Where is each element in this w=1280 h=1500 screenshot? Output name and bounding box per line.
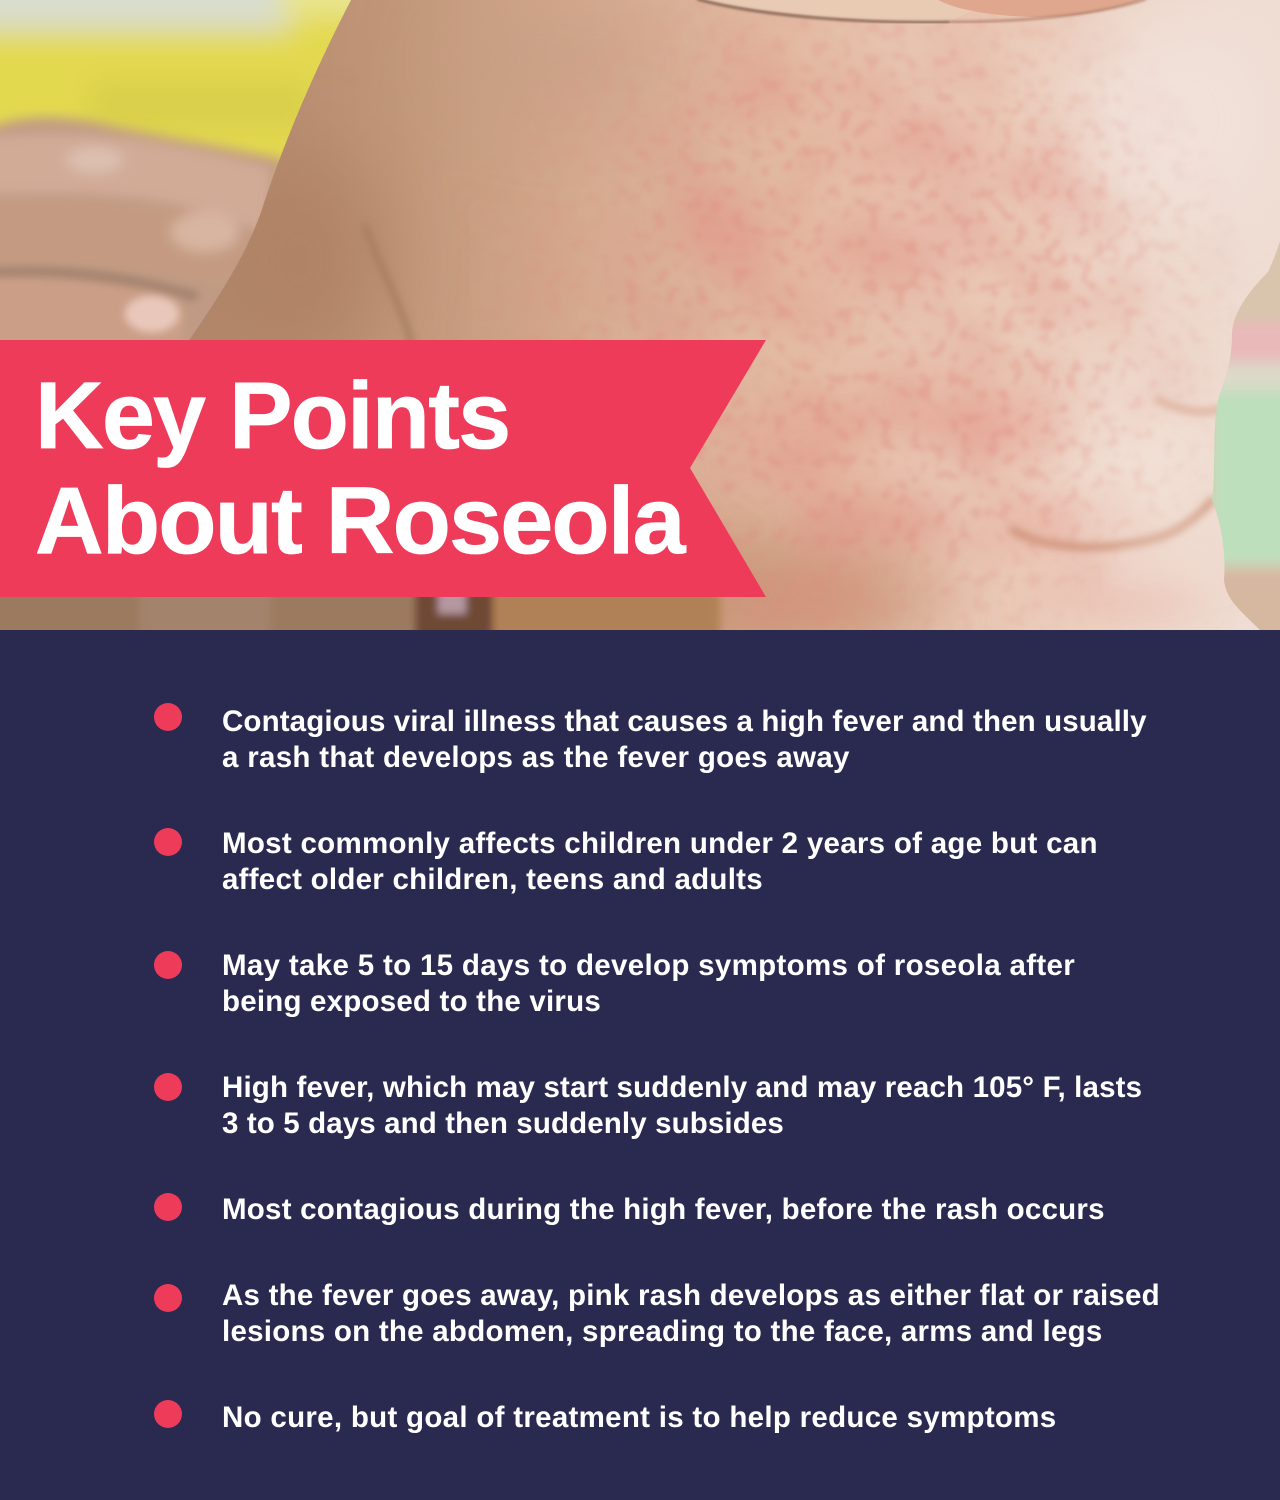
bullet 6	[154, 1284, 182, 1312]
text: point 2: Most commonly affects children under 2 years of age but can	[222, 827, 1098, 860]
rash blotches	[678, 76, 1182, 613]
torso folds	[1010, 398, 1222, 547]
text: point 3: being exposed to the virus	[222, 985, 601, 1018]
bullet 2	[154, 828, 182, 856]
torso	[180, 0, 1280, 670]
bullet 1	[154, 703, 182, 731]
text: point 6: lesions on the abdomen, spreading to the face, arms and legs	[222, 1315, 1103, 1348]
text: point 3: May take 5 to 15 days to develop symptoms of roseola after	[222, 949, 1075, 982]
chin	[697, 0, 1146, 22]
title banner	[0, 340, 766, 597]
bullet 7	[154, 1400, 182, 1428]
bullet 3	[154, 951, 182, 979]
blurred background	[0, 0, 1280, 630]
text: point 1	[222, 705, 1147, 774]
bullet 4	[154, 1073, 182, 1101]
text: point 1: Contagious viral illness that causes a high fever and then usually	[222, 705, 1147, 738]
text: point 4	[222, 1071, 1142, 1140]
title: About Roseola	[35, 468, 684, 574]
title: Key Points	[35, 363, 509, 469]
text: point 4: High fever, which may start suddenly and may reach 105° F, lasts	[222, 1071, 1142, 1104]
panel: key points	[0, 630, 1280, 1500]
arm crease	[365, 225, 412, 345]
text: point 6: As the fever goes away, pink rash develops as either flat or raised	[222, 1279, 1160, 1312]
rash bumps	[602, 23, 1196, 610]
text: point 3	[222, 949, 1075, 1018]
photo: baby's torso with roseola rash	[0, 0, 1280, 630]
text: point 7: No cure, but goal of treatment is to help reduce symptoms	[222, 1401, 1056, 1434]
text: point 6	[222, 1279, 1160, 1348]
bullet 5	[154, 1193, 182, 1221]
text: point 4: 3 to 5 days and then suddenly subsides	[222, 1107, 784, 1140]
lower left strip	[0, 580, 720, 640]
text: point 2: affect older children, teens and adults	[222, 863, 763, 896]
text: point 1: a rash that develops as the fever goes away	[222, 741, 850, 774]
adult hand	[0, 118, 285, 350]
title	[35, 363, 686, 574]
text: point 2	[222, 827, 1098, 896]
low-frequency shading	[250, 19, 1228, 630]
rash patches	[658, 40, 1141, 532]
text: point 5: Most contagious during the high fever, before the rash occurs	[222, 1193, 1105, 1226]
